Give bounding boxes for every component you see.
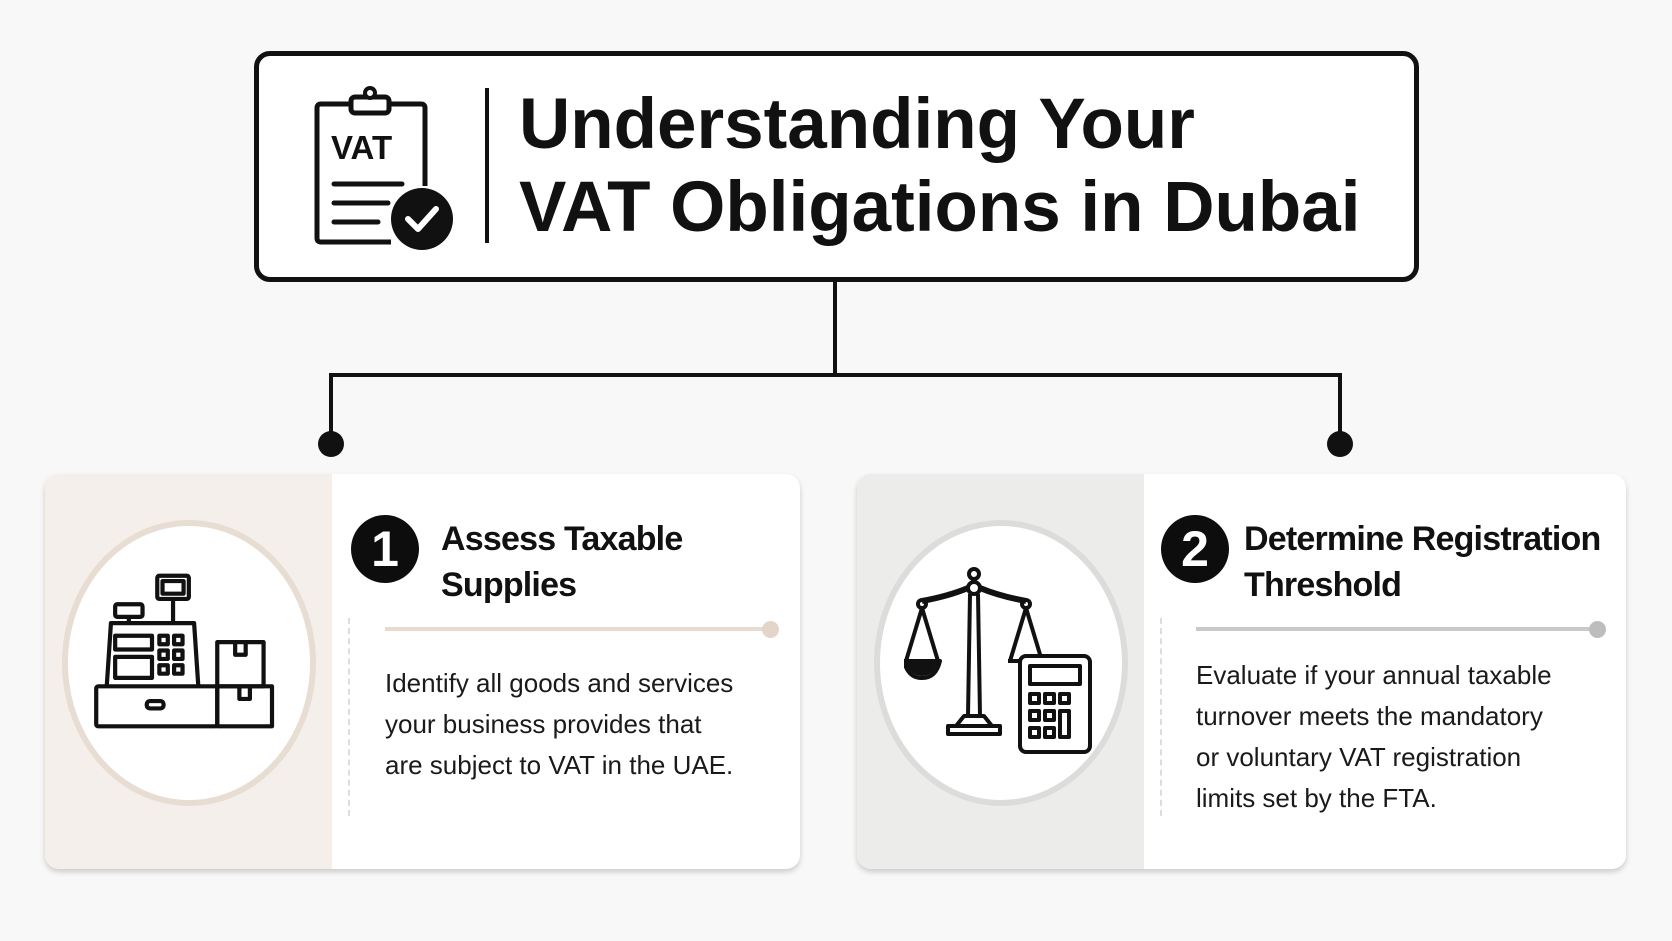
- number badge 2: [1161, 515, 1229, 583]
- number badge 1: [351, 515, 419, 583]
- icon: VAT clipboard: [314, 86, 453, 250]
- title text: [519, 85, 1360, 247]
- body 2: or voluntary VAT registration: [1196, 742, 1521, 772]
- body 1: your business provides that: [385, 709, 702, 739]
- heading 1: [441, 520, 682, 604]
- heading 2: [1244, 520, 1600, 604]
- heading 1: Assess Taxable: [441, 520, 682, 558]
- divider 2: [1196, 627, 1596, 631]
- body 1: Identify all goods and services: [385, 668, 733, 698]
- body 2: Evaluate if your annual taxable: [1196, 660, 1552, 690]
- heading 1: Supplies: [441, 566, 576, 604]
- divider 1: [385, 627, 770, 631]
- title box: [254, 51, 1419, 282]
- heading 2: Threshold: [1244, 566, 1401, 604]
- body 1: are subject to VAT in the UAE.: [385, 750, 733, 780]
- number badge 2: 2: [1181, 521, 1209, 577]
- connector lines: [318, 282, 1353, 457]
- panel: step 2: [857, 474, 1626, 869]
- title text: VAT Obligations in Dubai: [519, 168, 1360, 247]
- title text: Understanding Your: [519, 85, 1195, 164]
- body 1: [385, 668, 733, 780]
- panel: step 1: [45, 474, 800, 869]
- body 2: turnover meets the mandatory: [1196, 701, 1543, 731]
- icon: VAT clipboard: VAT: [331, 129, 392, 166]
- icon: cash register: [62, 520, 316, 806]
- body 2: [1196, 660, 1552, 813]
- heading 2: Determine Registration: [1244, 520, 1600, 558]
- body 2: limits set by the FTA.: [1196, 783, 1437, 813]
- icon: scales and calculator: [874, 520, 1128, 806]
- number badge 1: 1: [371, 521, 399, 577]
